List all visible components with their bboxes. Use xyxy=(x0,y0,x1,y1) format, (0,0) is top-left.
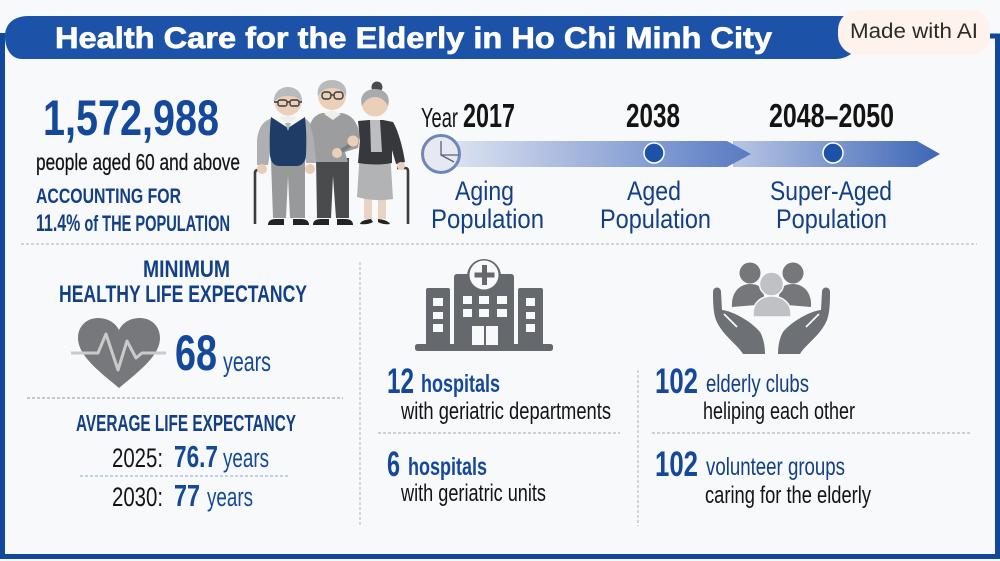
timeline: 2038: 2038 xyxy=(626,97,680,134)
timeline: 2048–2050 xyxy=(769,97,894,234)
stat: 102 elderly clubs: 102 xyxy=(655,362,698,401)
stat: 102 volunteer groups: caring for the elderly xyxy=(705,482,871,509)
stat: 68 years: 68 xyxy=(175,325,217,381)
stat: 2025: 2025: xyxy=(112,443,163,473)
timeline: 2038: Population xyxy=(600,204,711,234)
stat: 2030: 2030: xyxy=(112,482,163,512)
timeline: 2038 xyxy=(600,97,711,234)
heading: minimum healthy life expectancy xyxy=(59,256,307,308)
stat: 12 hospitals: with geriatric departments xyxy=(400,398,611,425)
stat: population aged 60 and above: 1,572,988 xyxy=(43,90,219,146)
icon: heart with pulse xyxy=(71,318,166,388)
panel: community support xyxy=(655,262,871,509)
middle man xyxy=(310,80,360,225)
stat: 2025: years xyxy=(223,443,269,473)
timeline: 2038: Aged xyxy=(627,176,681,206)
timeline: 2017: Population xyxy=(431,204,544,234)
icon: hospital xyxy=(415,259,553,351)
stat: 12 hospitals: 12 xyxy=(387,362,414,401)
heading: minimum healthy life expectancy: MINIMUM xyxy=(143,256,230,283)
stat: population aged 60 and above xyxy=(36,90,240,237)
stat: 2025 xyxy=(112,439,269,474)
stat: 6 hospitals: hospitals xyxy=(408,453,487,481)
stat: 102 elderly clubs xyxy=(655,362,855,425)
timeline arrow xyxy=(422,136,940,172)
stat: 68 years: years xyxy=(223,346,271,377)
right cane xyxy=(397,168,408,224)
stat: 2030: years xyxy=(207,482,253,512)
stat: 6 hospitals: with geriatric units xyxy=(400,480,546,507)
title: Health Care for the Elderly in Ho Chi Minh City xyxy=(55,22,772,55)
timeline: 2017: Year xyxy=(421,102,458,133)
marker: 2038 xyxy=(644,143,664,163)
icon: elderly people xyxy=(255,80,408,225)
heading: average life expectancy: AVERAGE LIFE EXPECTANCY xyxy=(76,410,296,436)
stat: 102 volunteer groups: 102 xyxy=(655,445,698,484)
stat: 12 hospitals xyxy=(387,362,611,425)
stat: 102 volunteer groups xyxy=(655,445,871,509)
icon: clock xyxy=(422,136,460,172)
panel: life expectancy xyxy=(59,256,307,513)
stat: 102 volunteer groups: volunteer groups xyxy=(706,453,845,481)
badge: made with AI xyxy=(838,10,990,55)
timeline: 2048–2050: Super-Aged xyxy=(770,176,892,206)
stat: population aged 60 and above: 11.4% of THE POPULATION xyxy=(36,210,230,237)
timeline: 2048–2050: Population xyxy=(776,204,887,234)
panel: hospitals xyxy=(387,259,611,507)
stat: 68 years xyxy=(175,325,271,381)
stat: 102 elderly clubs: heliping each other xyxy=(703,398,855,425)
stat: population aged 60 and above: ACCOUNTING FOR xyxy=(36,185,181,208)
badge: made with AI: Made with AI xyxy=(850,20,978,43)
timeline: 2048–2050: 2048–2050 xyxy=(769,97,894,134)
title banner xyxy=(5,16,855,59)
woman xyxy=(357,82,405,224)
left man xyxy=(257,87,316,225)
marker: 2048–2050 xyxy=(823,143,843,163)
stat: 102 elderly clubs: elderly clubs xyxy=(706,370,809,398)
stat: 12 hospitals: hospitals xyxy=(421,370,500,398)
stat: 6 hospitals: 6 xyxy=(387,445,400,484)
heading: minimum healthy life expectancy: HEALTHY LIFE EXPECTANCY xyxy=(59,281,307,308)
stat: population aged 60 and above: people aged 60 and above xyxy=(36,149,240,175)
stat: 6 hospitals xyxy=(387,445,546,507)
timeline: 2017 xyxy=(421,97,544,234)
left cane xyxy=(255,170,266,224)
timeline: 2017: 2017 xyxy=(463,97,515,134)
icon: hands holding people xyxy=(713,262,830,354)
stat: 2030: 77 xyxy=(174,478,200,513)
stat: 2030 xyxy=(112,478,253,513)
timeline: 2017: Aging xyxy=(455,176,514,206)
stat: 2025: 76.7 xyxy=(174,439,218,474)
